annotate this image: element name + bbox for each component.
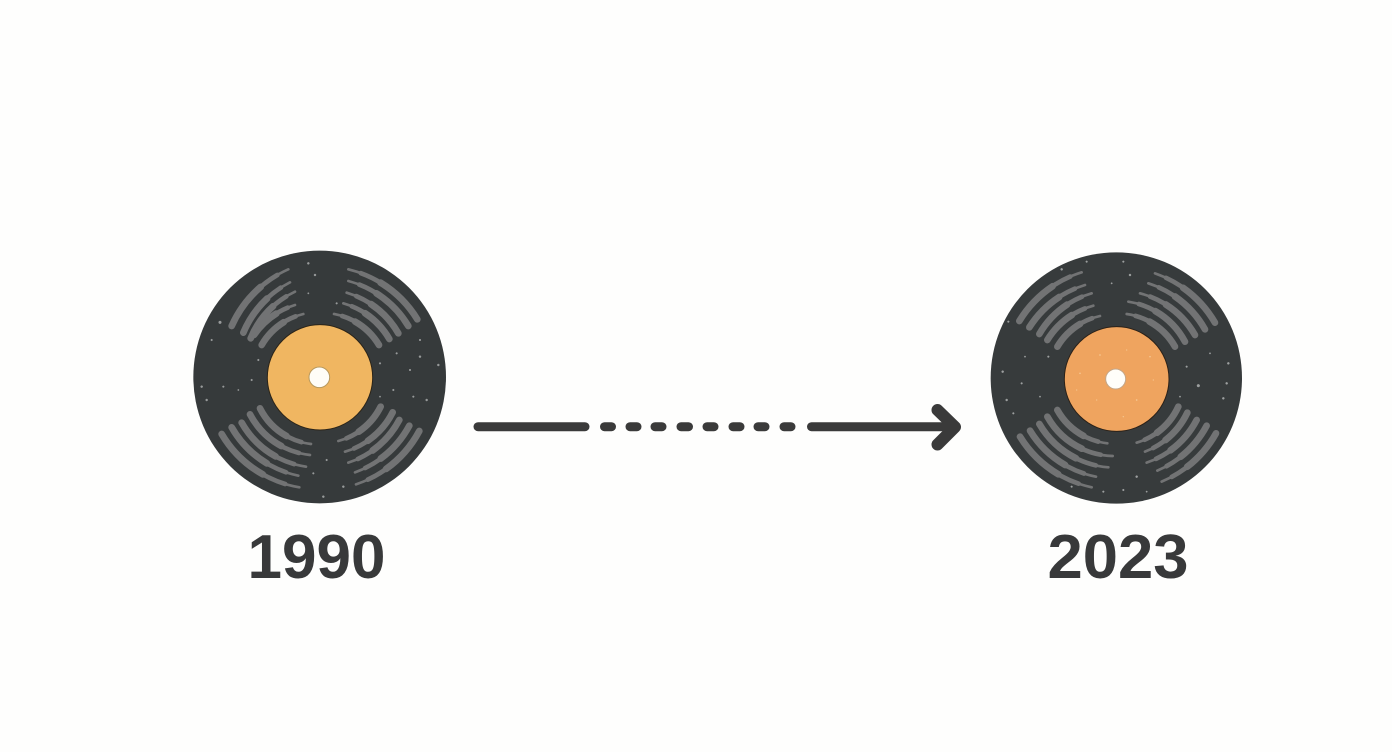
disc bbox=[991, 252, 1242, 504]
vinyl record: 1990 bbox=[193, 251, 446, 503]
spindle hole bbox=[1106, 369, 1126, 389]
record grooves bbox=[222, 269, 419, 487]
year label: 2023: 2023 bbox=[1048, 523, 1188, 592]
dust specks bbox=[1002, 261, 1229, 492]
orange label bbox=[267, 325, 373, 430]
year label: 1990: 1990 bbox=[248, 523, 385, 592]
spindle hole bbox=[309, 367, 330, 388]
disc bbox=[193, 251, 446, 503]
label flecks bbox=[1076, 349, 1154, 417]
vinyl record: 2023 bbox=[991, 252, 1242, 504]
timeline arrow bbox=[478, 410, 955, 444]
record grooves bbox=[1019, 272, 1216, 487]
orange label bbox=[1064, 327, 1169, 431]
dust specks bbox=[201, 262, 439, 498]
